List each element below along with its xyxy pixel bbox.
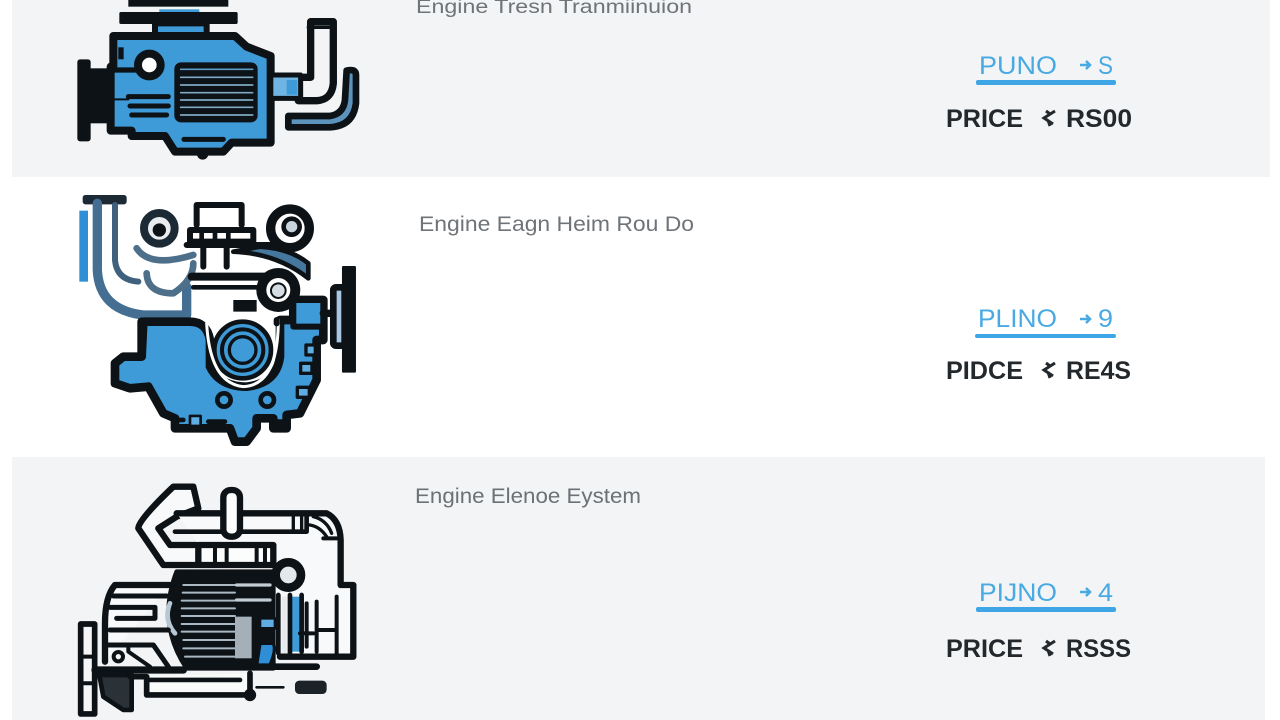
panel: bottom row background [12, 457, 1265, 720]
text: row three description: Engine Elenoe Eystem [415, 485, 641, 508]
label: row one plan [976, 52, 1116, 85]
label: row three price [946, 635, 1131, 663]
label: row three price: PRICE [946, 635, 1023, 663]
text: row two description: Engine Eagn Heim Rou Do [419, 213, 694, 236]
icon: engine three [81, 487, 353, 714]
label: row two plan: PLINO [978, 305, 1057, 333]
label: row three plan: 4 [1098, 579, 1113, 607]
label: row three plan [976, 579, 1116, 612]
panel: top row background [12, 0, 1270, 177]
label: row two plan [975, 305, 1116, 338]
label: row two price: RE4S [1066, 357, 1131, 385]
icon: engine one [77, 0, 356, 160]
label: row one plan: S [1098, 52, 1113, 80]
icon: engine two [79, 195, 356, 442]
label: row three price: RSSS [1066, 635, 1131, 663]
label: row three plan: PIJNO [979, 579, 1057, 607]
label: row two plan: 9 [1098, 305, 1113, 333]
label: row two price: PIDCE [946, 357, 1023, 385]
label: row one price: PRICE [946, 105, 1023, 133]
label: row one plan: PUNO [979, 52, 1057, 80]
label: row one price: RS00 [1066, 105, 1132, 133]
label: row two price [946, 357, 1131, 385]
label: row one price [946, 105, 1132, 133]
